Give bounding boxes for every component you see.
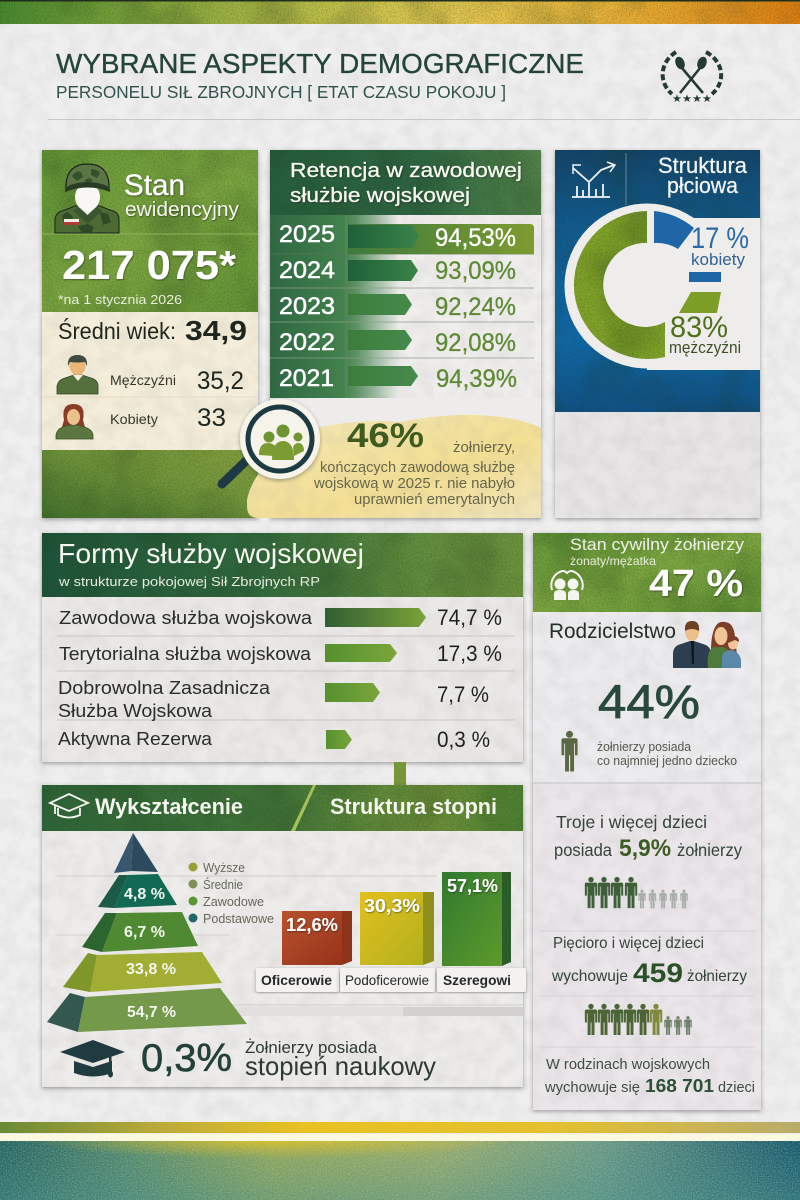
icon row: six large and three small figures — [585, 1004, 692, 1035]
text: zolnierzy description: wojskową w 2025 r. nie nabyło — [313, 476, 515, 492]
value: 17 percent kobiety — [691, 222, 749, 269]
row: 2022 — [279, 329, 516, 357]
chart: education pyramid — [47, 833, 247, 1032]
icon: graduation cap — [50, 794, 88, 818]
heading: stan cywilny: Stan cywilny żołnierzy — [570, 535, 745, 554]
text: troje i wiecej dzieci: posiada — [554, 840, 612, 860]
value: 35,2: 35,2 — [197, 367, 244, 395]
text: piecioro i wiecej dzieci: Pięcioro i więcej dzieci — [553, 935, 704, 952]
icon: family — [673, 621, 741, 668]
top colour band — [0, 0, 800, 24]
bar: podoficerowie — [360, 892, 434, 965]
subheading: w strukturze pokojowej Sił Zbrojnych RP — [58, 574, 320, 589]
legend: Zawodowe — [203, 894, 264, 909]
emblem: crossed spoons with wreath and stars — [663, 52, 721, 105]
bottom colour band — [0, 1122, 800, 1200]
footnote: *na 1 stycznia 2026 — [58, 293, 182, 307]
text: co najmniej jedno dziecko — [597, 740, 737, 768]
label: szeregowi — [437, 968, 526, 992]
value: 33: 33 — [197, 404, 226, 432]
value: 34,9: 34,9 — [185, 315, 247, 346]
row: 2024: 2024 — [279, 257, 335, 284]
text: piecioro i wiecej dzieci — [551, 935, 747, 988]
bar: oficerowie: 12,6% — [286, 915, 338, 935]
heading: ewidencyjny: ewidencyjny — [125, 199, 239, 221]
row: zawodowa: 74,7 % — [437, 605, 502, 630]
connector — [394, 762, 406, 786]
label: oficerowie: Oficerowie — [261, 972, 332, 988]
chart: education pyramid: 54,7 % — [127, 1004, 176, 1021]
panel: stan ewidencyjny — [42, 150, 258, 518]
heading: struktura plciowa: płciowa — [667, 173, 739, 198]
chart: education pyramid: 33,8 % — [126, 961, 176, 978]
emblem: crossed spoons with wreath and stars: ★★★★ — [672, 93, 712, 105]
text: troje i wiecej dzieci: 5,9% — [619, 835, 671, 862]
legend — [188, 860, 274, 926]
row: 2021: 94,39% — [436, 365, 517, 393]
number: 217 075: 217 075* — [62, 242, 236, 288]
row: 2022: 2022 — [279, 329, 335, 356]
row: dobrowolna: 7,7 % — [437, 682, 489, 707]
heading: wyksztalcenie: Wykształcenie — [95, 794, 243, 819]
text: w rodzinach wojskowych: dzieci — [718, 1079, 755, 1096]
row: 2023 — [279, 293, 516, 321]
icon: person — [561, 731, 578, 771]
label: sredni wiek: Średni wiek: — [58, 317, 176, 344]
text: zolnierzy description — [313, 440, 515, 508]
row: dobrowolna — [58, 677, 489, 721]
legend: Podstawowe — [203, 911, 274, 926]
row: 2025: 94,53% — [435, 224, 516, 252]
icon: man — [57, 355, 98, 394]
heading: struktura plciowa: Struktura — [658, 153, 748, 178]
callout: 46 percent — [247, 415, 541, 518]
panel: wyksztalcenie i struktura stopni — [42, 785, 526, 1087]
label: mezczyzni: Mężczyźni — [110, 372, 176, 388]
row: terytorialna — [59, 641, 502, 666]
value: 17 percent kobiety: 17 % — [691, 222, 749, 255]
label: oficerowie — [256, 968, 339, 992]
row: aktywna rezerwa: Aktywna Rezerwa — [58, 728, 213, 749]
row: 2024: 93,09% — [435, 257, 516, 285]
icon: woman — [56, 404, 93, 439]
label: szeregowi: Szeregowi — [443, 972, 511, 988]
chart: donut — [574, 211, 721, 359]
subtitle: PERSONELU SIŁ ZBROJNYCH [ ETAT CZASU POKOJU ] — [56, 82, 506, 102]
heading: retencja — [290, 159, 522, 207]
text: piecioro i wiecej dzieci: wychowuje — [551, 968, 628, 985]
heading: rodzicielstwo: Rodzicielstwo — [549, 620, 676, 643]
text: troje i wiecej dzieci — [554, 812, 742, 862]
chart: education pyramid: 6,7 % — [124, 924, 165, 941]
text: w rodzinach wojskowych: wychowuje się — [544, 1079, 640, 1096]
bar: szeregowi — [442, 872, 511, 966]
bar: podoficerowie: 30,3% — [364, 896, 420, 916]
text: piecioro i wiecej dzieci: żołnierzy — [687, 968, 747, 985]
chart: education pyramid: 4,8 % — [124, 886, 165, 903]
row: aktywna rezerwa — [58, 727, 490, 752]
text: co najmniej jedno dziecko: co najmniej jedno dziecko — [597, 754, 737, 768]
heading: retencja: służbie wojskowej — [290, 184, 470, 207]
heading: struktura stopni: Struktura stopni — [330, 794, 497, 819]
text: stopien naukowy: stopień naukowy — [245, 1051, 436, 1081]
value: 44 percent: 44% — [598, 675, 700, 728]
bar: szeregowi: 57,1% — [447, 876, 498, 896]
heading: stan: Stan — [124, 169, 185, 202]
value: 47 percent: 47 % — [649, 563, 743, 605]
icon: academic cap — [60, 1040, 125, 1078]
value: 0,3 percent: 0,3% — [141, 1037, 232, 1080]
row: dobrowolna: Służba Wojskowa — [58, 700, 213, 721]
text: w rodzinach wojskowych — [544, 1056, 755, 1096]
text: w rodzinach wojskowych: W rodzinach wojskowych — [546, 1056, 710, 1073]
row: 2023: 92,24% — [435, 293, 516, 321]
subheading: zonaty: żonaty/mężatka — [570, 554, 656, 568]
text: stopien naukowy: Żołnierzy posiada — [245, 1038, 378, 1057]
row: aktywna rezerwa: 0,3 % — [437, 727, 490, 752]
value: 17 percent kobiety: kobiety — [691, 250, 745, 269]
row: dobrowolna: Dobrowolna Zasadnicza — [58, 677, 271, 698]
row: zawodowa — [59, 605, 502, 630]
row: 2021: 2021 — [279, 365, 334, 392]
icon row: four large and five small figures — [585, 877, 688, 908]
text: zolnierzy description: uprawnień emerytalnych — [354, 492, 515, 508]
icon: couple — [551, 571, 583, 600]
heading: formy sluzby: Formy służby wojskowej — [58, 538, 364, 569]
icon: chart — [572, 162, 615, 197]
label: podoficerowie: Podoficerowie — [345, 972, 429, 988]
text: troje i wiecej dzieci: żołnierzy — [677, 840, 742, 860]
value: 46 percent: 46% — [347, 417, 424, 455]
heading: struktura plciowa — [658, 153, 748, 198]
row: zawodowa: Zawodowa służba wojskowa — [59, 607, 313, 628]
legend: Wyższe — [203, 860, 245, 875]
bar: oficerowie — [282, 911, 352, 965]
row: 2022: 92,08% — [435, 329, 516, 357]
row: 2024 — [279, 257, 516, 285]
panel: stan cywilny i rodzicielstwo — [533, 533, 761, 1110]
row: terytorialna: Terytorialna służba wojskowa — [59, 643, 312, 664]
panel: retencja — [270, 150, 541, 518]
text: zolnierzy description: żołnierzy, — [453, 440, 515, 456]
icon: magnifier with people — [222, 399, 320, 484]
value: 83 percent mezczyzni: 83% — [670, 311, 728, 344]
row: 2021 — [279, 365, 517, 393]
row: 2023: 2023 — [279, 293, 335, 320]
value: 83 percent mezczyzni: mężczyźni — [669, 339, 741, 357]
heading: retencja: Retencja w zawodowej — [290, 159, 522, 182]
icon: soldier — [55, 164, 119, 233]
panel: struktura plciowa — [555, 150, 760, 518]
legend: Średnie — [203, 877, 243, 892]
text: w rodzinach wojskowych: 168 701 — [645, 1076, 714, 1096]
label: podoficerowie — [340, 968, 435, 992]
row: terytorialna: 17,3 % — [437, 641, 502, 666]
text: troje i wiecej dzieci: Troje i więcej dzieci — [556, 812, 707, 832]
title: WYBRANE ASPEKTY DEMOGRAFICZNE — [56, 48, 584, 79]
row: 2025 — [279, 221, 534, 254]
row: 2025: 2025 — [279, 221, 335, 248]
text: stopien naukowy — [245, 1038, 436, 1081]
text: zolnierzy description: kończących zawodową służbę — [320, 460, 515, 476]
panel: formy sluzby — [42, 533, 523, 762]
label: kobiety: Kobiety — [110, 411, 158, 427]
text: piecioro i wiecej dzieci: 459 — [633, 958, 683, 988]
text: co najmniej jedno dziecko: żołnierzy posiada — [597, 740, 691, 754]
value: 83 percent mezczyzni — [669, 311, 741, 357]
